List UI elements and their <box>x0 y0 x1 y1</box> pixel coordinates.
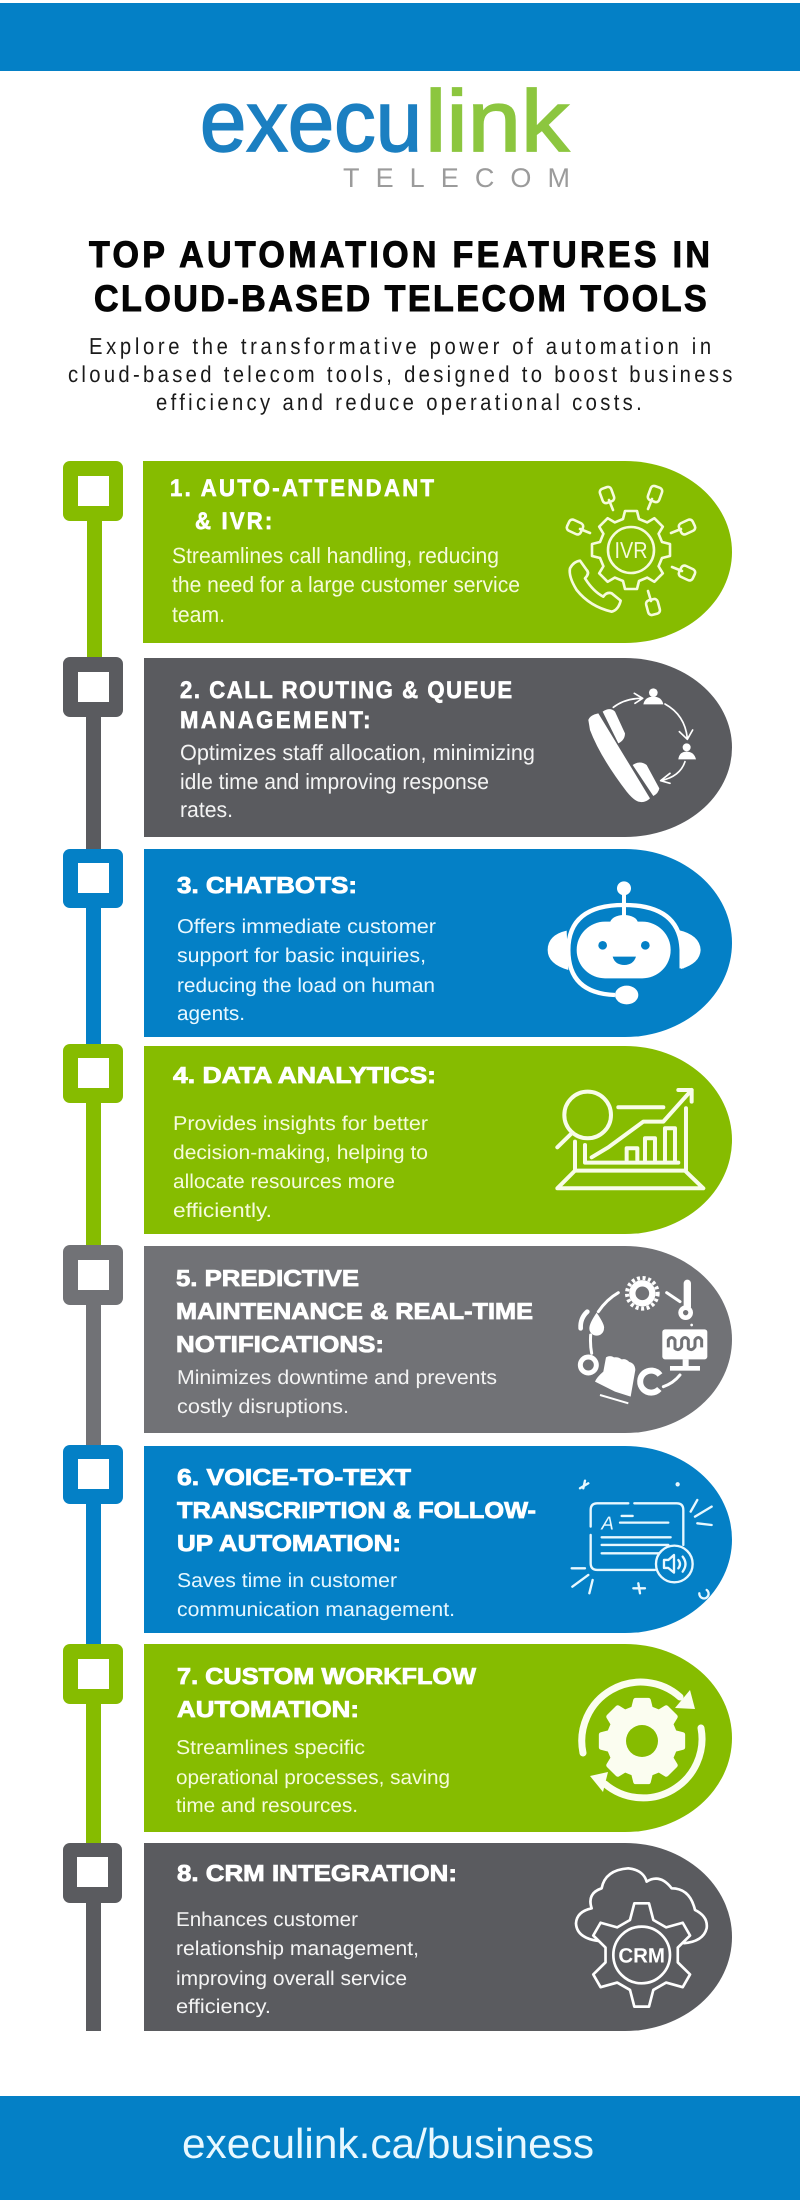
heading: AUTOMATION: <box>177 1696 359 1722</box>
icon: CRM cloud gear <box>576 1868 707 2007</box>
icon: CRM cloud gear: CRM <box>618 1944 665 1967</box>
heading: 3. CHATBOTS: <box>177 872 357 898</box>
description <box>173 1113 428 1222</box>
intro text <box>68 333 732 415</box>
card background <box>144 1446 732 1633</box>
icon: maintenance cycle <box>580 1278 707 1403</box>
description: idle time and improving response <box>180 769 489 794</box>
icon: IVR gear with phone: IVR <box>614 537 648 563</box>
title <box>89 234 710 319</box>
heading <box>176 1265 533 1357</box>
description: agents. <box>177 1003 245 1025</box>
description <box>176 1909 419 2018</box>
icon: phone handset routing <box>588 688 696 802</box>
description: Optimizes staff allocation, minimizing <box>180 740 535 765</box>
description <box>172 543 520 627</box>
panel: CRM integration <box>144 1843 732 2031</box>
description: time and resources. <box>176 1795 358 1817</box>
title: CLOUD-BASED TELECOM TOOLS <box>94 278 707 319</box>
description <box>176 1737 450 1817</box>
card background <box>144 849 732 1037</box>
timeline node 1 <box>63 461 123 660</box>
heading: TRANSCRIPTION & FOLLOW- <box>177 1497 536 1523</box>
heading: 8. CRM INTEGRATION: <box>177 1860 457 1886</box>
description: improving overall service <box>176 1968 407 1990</box>
heading <box>177 1464 536 1556</box>
timeline node 6 <box>63 1445 123 1647</box>
description: Enhances customer <box>176 1909 358 1931</box>
logo <box>200 73 570 193</box>
description: Minimizes downtime and prevents <box>177 1367 497 1389</box>
card background <box>143 461 732 643</box>
description: Offers immediate customer <box>177 916 436 938</box>
heading <box>177 1663 476 1722</box>
panel: auto-attendant and IVR <box>143 461 732 643</box>
timeline node 3 <box>63 849 123 1048</box>
description: allocate resources more <box>173 1171 395 1193</box>
timeline node 7 <box>63 1644 123 1846</box>
description: efficiently. <box>173 1200 272 1222</box>
description: relationship management, <box>176 1938 419 1960</box>
panel: custom workflow automation <box>144 1644 732 1832</box>
card background <box>144 1046 732 1234</box>
description: decision-making, helping to <box>173 1142 428 1164</box>
heading: NOTIFICATIONS: <box>176 1331 384 1357</box>
card background <box>144 1843 732 2031</box>
heading: 1. AUTO-ATTENDANT <box>170 475 434 502</box>
description: Streamlines specific <box>176 1737 365 1759</box>
description: support for basic inquiries, <box>177 945 426 967</box>
intro text: efficiency and reduce operational costs. <box>156 389 642 415</box>
description: Saves time in customer <box>177 1570 397 1592</box>
footer url: execulink.ca/business <box>182 2120 594 2167</box>
panel: data analytics <box>144 1046 732 1234</box>
description: efficiency. <box>176 1996 271 2018</box>
description: rates. <box>180 797 233 822</box>
panel: chatbots <box>144 849 732 1037</box>
timeline node 5 <box>63 1245 123 1448</box>
title: TOP AUTOMATION FEATURES IN <box>89 234 710 275</box>
heading: MANAGEMENT: <box>180 707 370 734</box>
logo word telecom: TELECOM <box>343 163 570 193</box>
description: communication management. <box>177 1599 455 1621</box>
description <box>177 1570 455 1621</box>
description <box>180 740 535 822</box>
description: costly disruptions. <box>177 1396 349 1418</box>
icon: transcript document with speaker <box>572 1481 712 1598</box>
heading: 2. CALL ROUTING & QUEUE <box>180 677 512 704</box>
description: Provides insights for better <box>173 1113 428 1135</box>
card background <box>144 1246 732 1433</box>
heading: & IVR: <box>195 508 272 535</box>
icon: gear with cycle arrows <box>582 1682 702 1798</box>
top banner <box>0 3 800 71</box>
timeline node 2 <box>63 657 123 852</box>
card background <box>144 658 732 837</box>
icon: laptop analytics with magnifier <box>557 1090 703 1188</box>
intro text: cloud-based telecom tools, designed to boost business <box>68 361 732 387</box>
heading <box>170 475 434 535</box>
heading: MAINTENANCE & REAL-TIME <box>176 1298 533 1324</box>
heading: 6. VOICE-TO-TEXT <box>177 1464 411 1490</box>
panel: predictive maintenance and real-time notifications <box>144 1246 732 1433</box>
footer banner <box>0 2096 800 2200</box>
timeline <box>63 461 123 2031</box>
timeline node 8 <box>63 1843 122 2031</box>
heading: 4. DATA ANALYTICS: <box>173 1062 436 1088</box>
timeline node 4 <box>63 1044 123 1248</box>
icon: transcript document with speaker: A <box>600 1512 614 1533</box>
description: the need for a large customer service <box>172 572 520 597</box>
description: Streamlines call handling, reducing <box>172 543 499 568</box>
logo word link: link <box>425 73 570 170</box>
logo word execu: execu <box>200 73 422 170</box>
icon: IVR gear with phone <box>566 485 696 616</box>
description: operational processes, saving <box>176 1767 450 1789</box>
description <box>177 916 436 1025</box>
panel: voice-to-text transcription and follow-up automation <box>144 1446 732 1633</box>
heading: 7. CUSTOM WORKFLOW <box>177 1663 476 1689</box>
card background <box>144 1644 732 1832</box>
icon: chatbot with headset <box>548 881 701 1004</box>
description <box>177 1367 497 1418</box>
heading <box>180 677 512 734</box>
heading: 5. PREDICTIVE <box>176 1265 359 1291</box>
description: team. <box>172 602 225 627</box>
heading: UP AUTOMATION: <box>177 1530 401 1556</box>
panel: call routing and queue management <box>144 658 732 837</box>
description: reducing the load on human <box>177 975 435 997</box>
intro text: Explore the transformative power of automation in <box>89 333 711 359</box>
